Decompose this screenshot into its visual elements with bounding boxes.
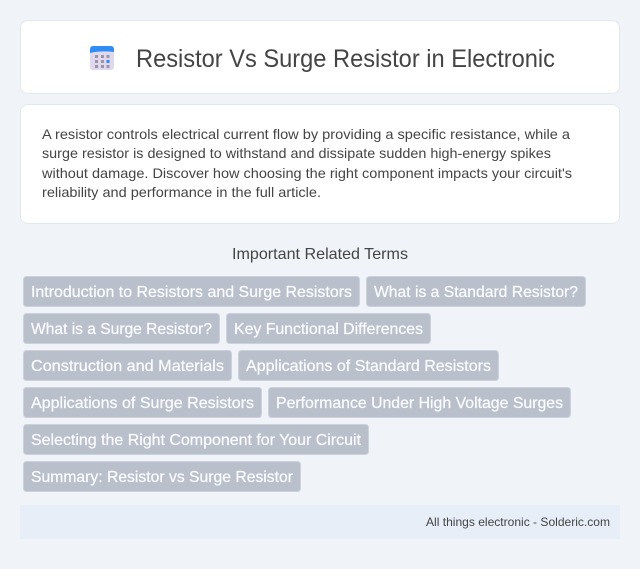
tag: construction: Construction and Materials [31, 358, 224, 375]
tag: construction [24, 350, 232, 380]
tag: introduction [24, 276, 360, 306]
panel: description [20, 104, 620, 224]
tag: standard resistor: What is a Standard Resistor? [374, 284, 578, 301]
tag: selecting [24, 424, 368, 454]
tag: functional differences: Key Functional Differences [234, 321, 423, 338]
tag: functional differences [226, 314, 430, 344]
tag: applications standard [238, 350, 498, 380]
tag: surge resistor: What is a Surge Resistor? [31, 321, 212, 338]
footer: All things electronic - Solderic.com [426, 515, 610, 529]
title: Resistor Vs Surge Resistor in Electronic [136, 45, 555, 73]
heading: related terms: Important Related Terms [232, 246, 408, 263]
tag: summary [24, 462, 300, 492]
description text: surge resistor is designed to withstand and dissipate sudden high-energy spikes [42, 145, 551, 161]
description text: without damage. Discover how choosing the right component impacts your circuit's [41, 165, 572, 181]
tag: surge resistor [24, 314, 220, 344]
title panel [20, 20, 620, 94]
tag: performance [268, 388, 570, 418]
description text: reliability and performance in the full article. [42, 184, 321, 200]
icon: calendar [90, 46, 114, 70]
tag: applications surge [24, 388, 262, 418]
tag: standard resistor [366, 276, 586, 306]
tag: summary: Summary: Resistor vs Surge Resistor [31, 469, 294, 486]
footer [20, 505, 620, 539]
description text: A resistor controls electrical current flow by providing a specific resistance, while a [42, 126, 570, 142]
tag: introduction: Introduction to Resistors and Surge Resistors [31, 284, 352, 301]
tags [24, 276, 586, 492]
tag: applications standard: Applications of Standard Resistors [246, 358, 491, 375]
tag: selecting: Selecting the Right Component for Your Circuit [31, 432, 362, 449]
tag: applications surge: Applications of Surge Resistors [31, 395, 254, 412]
tag: performance: Performance Under High Voltage Surges [276, 395, 563, 412]
description text [41, 126, 572, 200]
